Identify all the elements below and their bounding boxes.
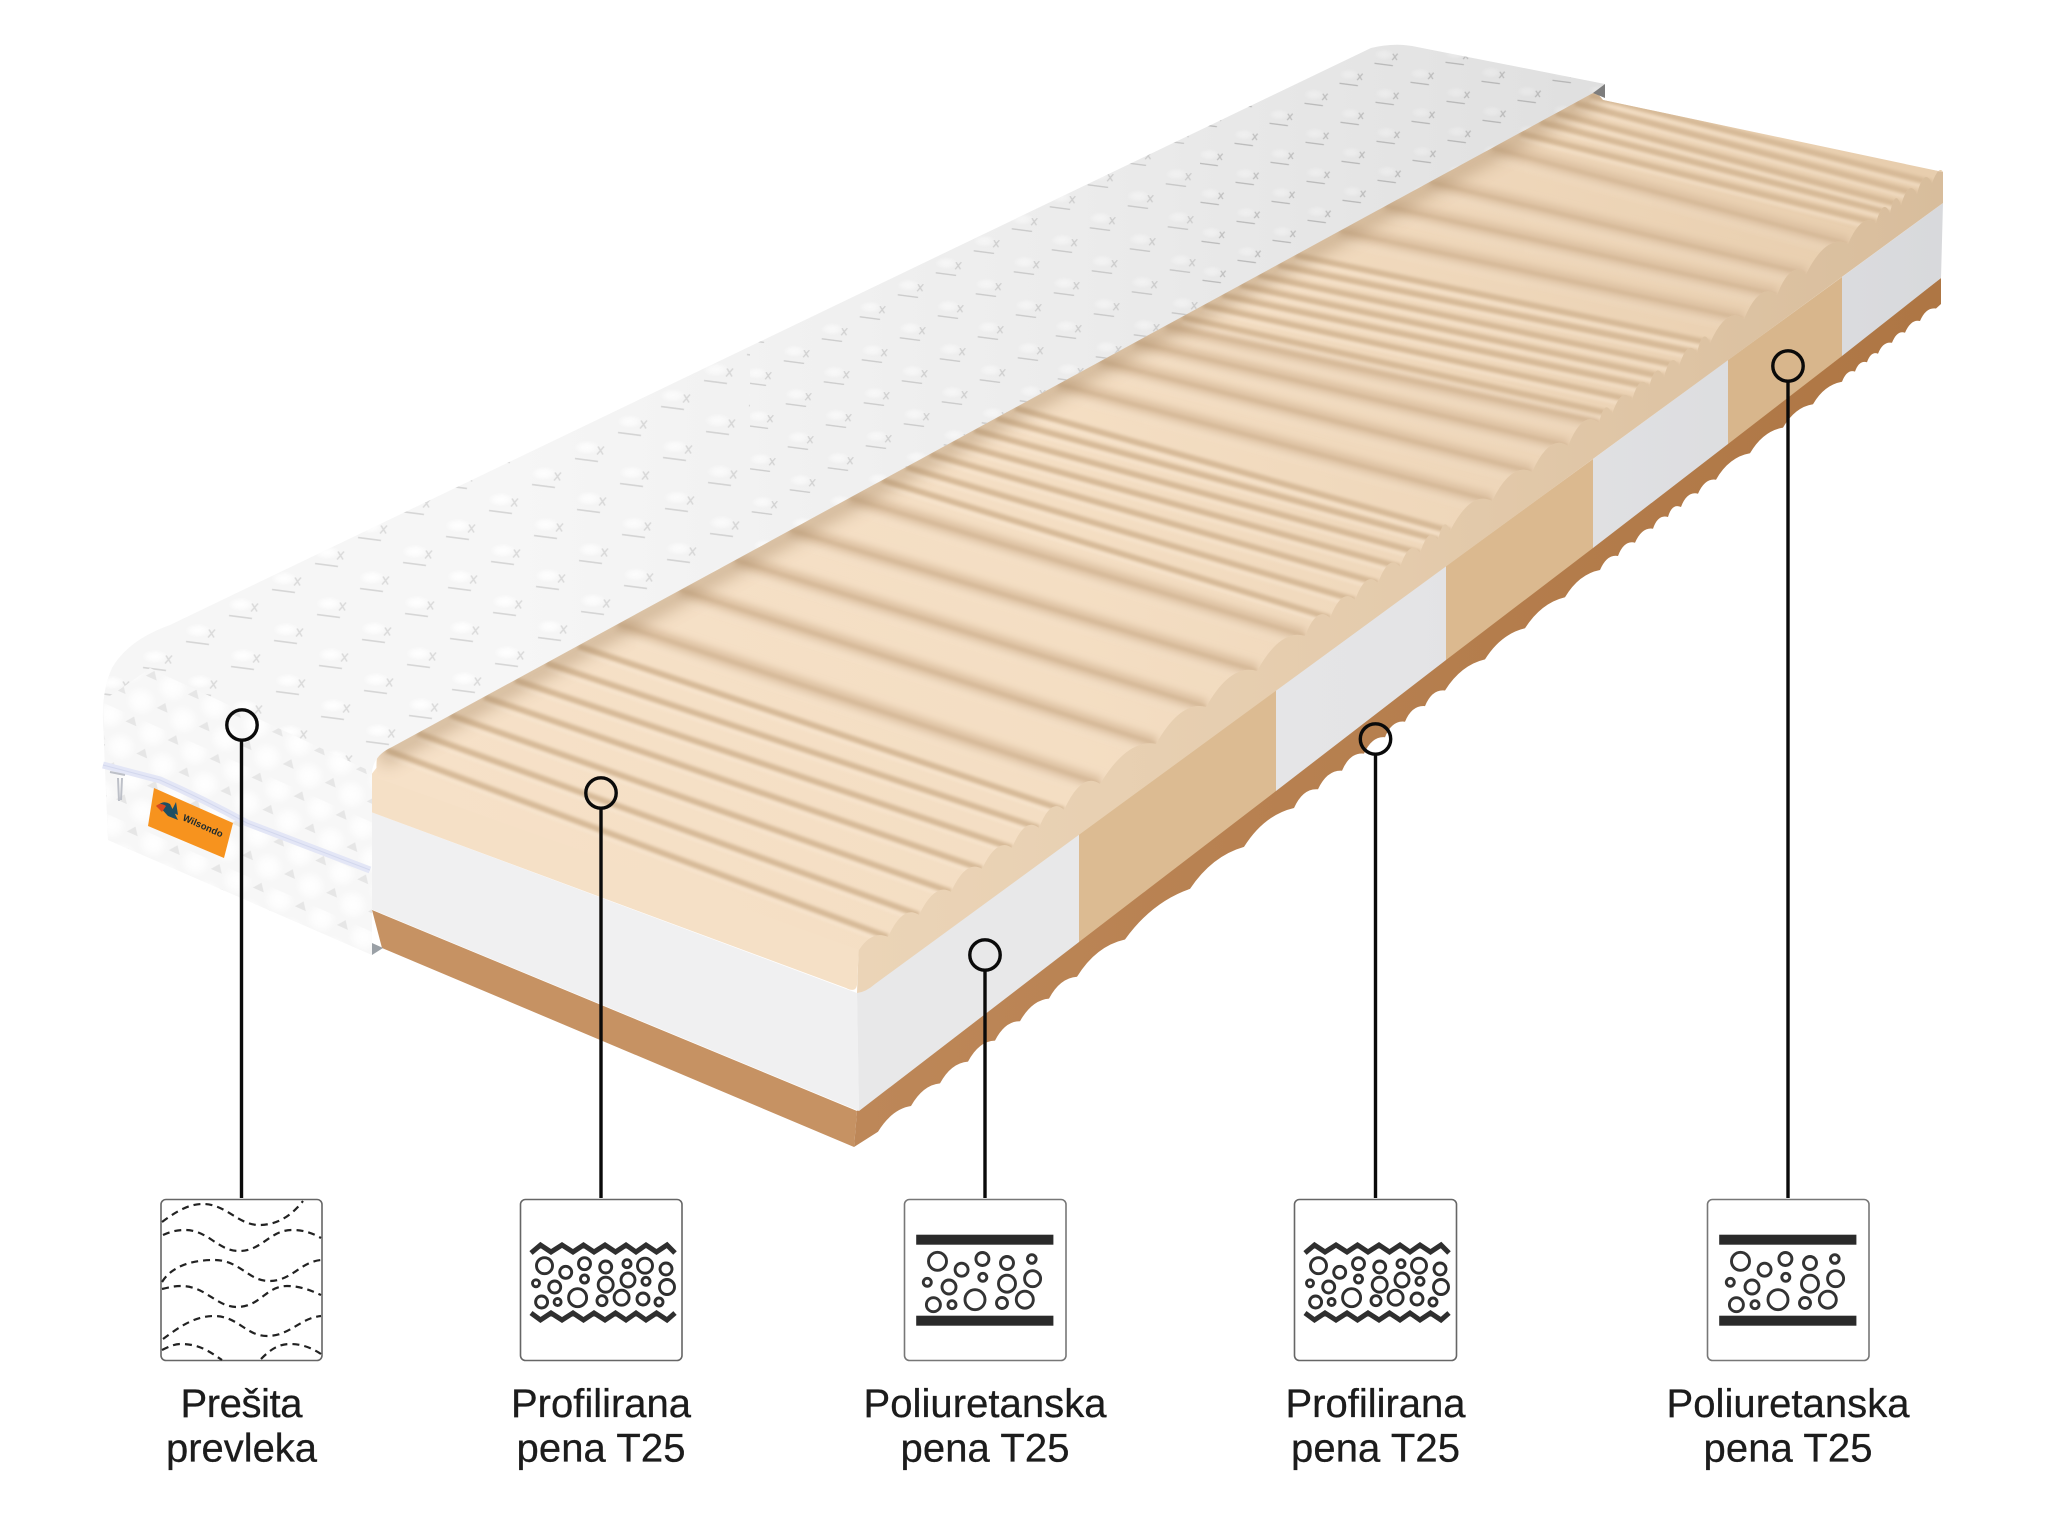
callout marker and leader: polyurethane foam tan <box>1773 351 1803 1198</box>
bottom profiled brown foam layer <box>372 278 1941 1147</box>
label: Profilirana <box>511 1382 692 1426</box>
brand name: Wilsondo <box>181 813 225 840</box>
label: prevleka <box>166 1426 318 1470</box>
label: Prešita <box>180 1382 303 1426</box>
middle foam layer with alternating panels <box>371 203 1943 1111</box>
brand label <box>148 788 233 858</box>
label: pena T25 <box>516 1426 686 1470</box>
item: quilted cover <box>161 1200 322 1470</box>
icon: profiled foam <box>1294 1200 1456 1360</box>
icon: quilted stitching <box>161 1200 322 1360</box>
callout marker and leader: polyurethane foam white <box>970 940 1000 1198</box>
cover bottom corner sliver <box>372 943 383 955</box>
label: pena T25 <box>1291 1426 1460 1470</box>
label: pena T25 <box>1704 1426 1872 1470</box>
item: profiled foam top <box>511 1200 692 1470</box>
top foam: profiled upper face <box>360 80 1960 970</box>
icon: profiled foam <box>520 1200 682 1360</box>
callout marker and leader: profiled foam top <box>586 778 616 1198</box>
quilted cover <box>90 20 1620 1000</box>
label: Profilirana <box>1286 1382 1466 1426</box>
item: profiled foam bottom <box>1286 1200 1466 1470</box>
icon: brand bird <box>156 802 178 820</box>
top foam: long side band <box>857 170 1943 993</box>
item: polyurethane foam white <box>864 1200 1107 1470</box>
callout marker and leader: cover <box>227 710 257 1198</box>
label: Poliuretanska <box>864 1382 1107 1426</box>
label: Poliuretanska <box>1666 1382 1910 1426</box>
zipper <box>103 765 370 870</box>
icon: polyurethane foam <box>904 1200 1066 1360</box>
item: polyurethane foam tan <box>1666 1200 1910 1470</box>
cover cut edge sliver <box>1593 84 1605 98</box>
mattress illustration <box>90 20 1960 1147</box>
top foam: front band <box>371 750 859 990</box>
label: pena T25 <box>900 1426 1070 1470</box>
icon: polyurethane foam <box>1708 1200 1869 1360</box>
callout marker and leader: profiled foam bottom <box>1360 724 1391 1198</box>
